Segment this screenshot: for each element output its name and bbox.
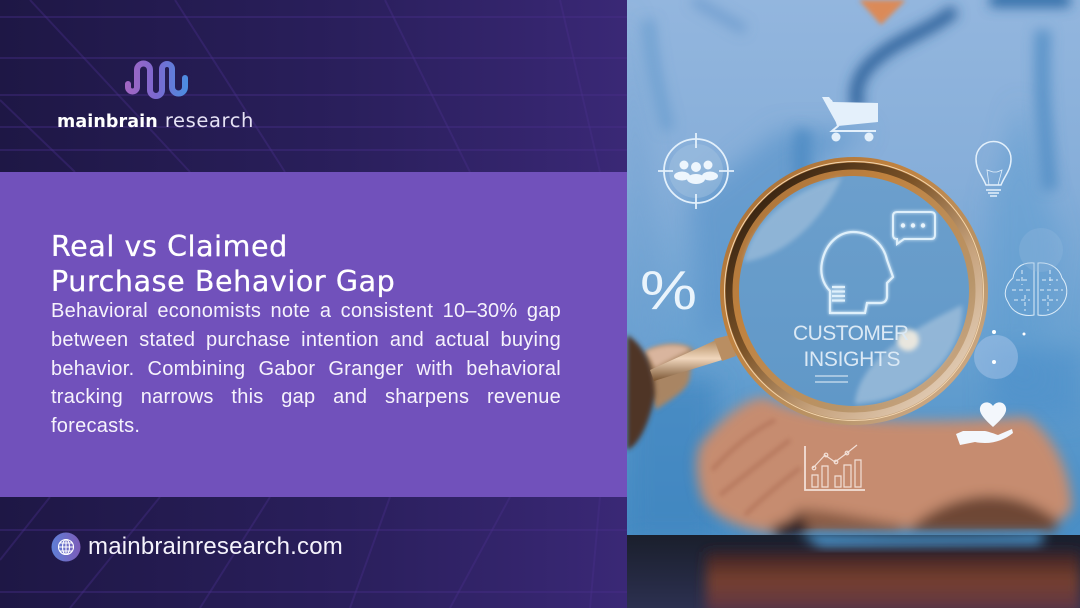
panel: purple content band xyxy=(0,172,627,497)
forearm and hand xyxy=(697,397,1072,538)
website url: mainbrainresearch.com xyxy=(88,533,343,560)
icon: light bulb xyxy=(976,142,1011,196)
icon: shopping cart xyxy=(822,97,878,142)
icon: percent sign: % xyxy=(640,259,697,321)
icon: brain xyxy=(1005,263,1067,315)
shirt folds xyxy=(627,0,1080,540)
title xyxy=(51,230,395,298)
neck skin xyxy=(859,0,906,25)
customer insights label xyxy=(793,322,909,371)
title: Real vs Claimed xyxy=(51,230,288,263)
customer insights label: INSIGHTS xyxy=(804,348,900,371)
decorative bokeh xyxy=(974,228,1063,379)
logo wordmark: mainbrain research xyxy=(57,109,254,132)
hand holding magnifier xyxy=(627,335,736,450)
table surface xyxy=(627,535,1080,608)
panel: customer insights photo xyxy=(627,0,1080,608)
icon: globe xyxy=(52,532,80,562)
customer insights label: CUSTOMER xyxy=(793,322,909,345)
table reflection xyxy=(706,552,1080,608)
icon: target audience xyxy=(658,133,734,209)
magnifier handle xyxy=(650,340,722,381)
logo: mainbrain research xyxy=(57,60,254,132)
panel: dark grid background xyxy=(0,0,627,608)
icon: brain wave xyxy=(125,60,188,99)
icon: heart in hand xyxy=(956,402,1013,445)
text block: description: Behavioral economists note a consistent 10–30% gap between stated purchase intention and actual buying behavior. Combining Gabor Granger with behavioral tracking narrows this gap and sharpens revenue forecasts. xyxy=(51,300,561,437)
magnifying glass xyxy=(720,157,988,425)
finger shadows xyxy=(712,420,800,515)
icon: speech bubble xyxy=(893,212,935,244)
title: Purchase Behavior Gap xyxy=(51,265,395,298)
icon: customer head xyxy=(821,232,893,313)
icon: growth chart xyxy=(805,445,865,490)
footer: website link xyxy=(52,532,343,562)
